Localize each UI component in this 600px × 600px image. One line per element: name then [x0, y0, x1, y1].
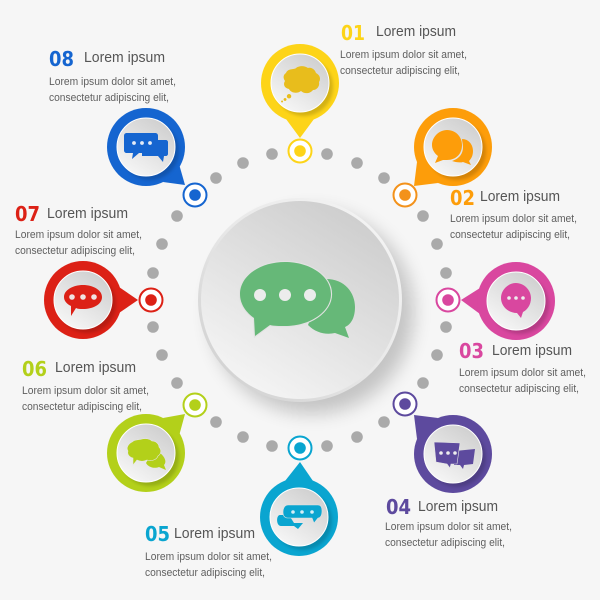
label 06: 06 [22, 357, 47, 381]
label 03 [459, 339, 586, 395]
label 01: 01 [341, 21, 365, 45]
icon: square speech bubbles [434, 442, 475, 469]
label 03: 03 [459, 339, 484, 363]
label 05: Lorem ipsum [174, 525, 255, 542]
pin 04 purple [414, 415, 492, 493]
label 04: Lorem ipsum dolor sit amet, [385, 521, 512, 533]
pin 06 lime [107, 414, 185, 492]
icon: wide speech bubbles [277, 505, 322, 529]
node 02 [394, 184, 416, 206]
icon: oval speech bubble [64, 285, 102, 316]
label 08: consectetur adipiscing elit, [49, 92, 169, 104]
icon: round speech bubble [501, 283, 531, 318]
icon: thought cloud [281, 66, 320, 102]
label 04: consectetur adipiscing elit, [385, 537, 505, 549]
icon: two speech bubbles [432, 130, 473, 165]
label 07: Lorem ipsum [47, 205, 128, 222]
label 07: consectetur adipiscing elit, [15, 245, 135, 257]
label 02: consectetur adipiscing elit, [450, 229, 570, 241]
label 04 [385, 495, 512, 549]
pin 08 blue [107, 108, 185, 186]
label 04: Lorem ipsum [418, 498, 498, 515]
label 05: Lorem ipsum dolor sit amet, [145, 551, 272, 563]
icon: central chat bubbles [240, 262, 355, 338]
pin 01 yellow [261, 44, 339, 138]
label 06 [22, 357, 149, 413]
label 02 [450, 186, 577, 241]
label 08: 08 [49, 47, 74, 71]
label 01: consectetur adipiscing elit, [340, 65, 460, 77]
node 01 [288, 140, 312, 162]
node 03 [436, 288, 460, 312]
pin 05 cyan [260, 462, 338, 556]
label 05: consectetur adipiscing elit, [145, 567, 265, 579]
label 07: 07 [15, 202, 40, 226]
pin 07 red [44, 261, 138, 339]
label 06: consectetur adipiscing elit, [22, 401, 142, 413]
label 01 [340, 21, 467, 77]
node 08 [184, 184, 206, 206]
label 02: Lorem ipsum dolor sit amet, [450, 213, 577, 225]
pin 03 magenta [461, 262, 555, 340]
label 08 [49, 47, 176, 104]
icon: rounded square bubbles [124, 133, 168, 162]
label 03: Lorem ipsum dolor sit amet, [459, 367, 586, 379]
pin 02 orange [414, 108, 492, 186]
label 08: Lorem ipsum dolor sit amet, [49, 76, 176, 88]
node 05 [288, 436, 312, 460]
label 05 [145, 522, 272, 579]
label 03: consectetur adipiscing elit, [459, 383, 579, 395]
label 01: Lorem ipsum dolor sit amet, [340, 49, 467, 61]
dotted ring [147, 148, 452, 452]
label 06: Lorem ipsum dolor sit amet, [22, 385, 149, 397]
central chat disc [198, 198, 414, 414]
label 04: 04 [386, 495, 411, 519]
node 04 [394, 392, 416, 416]
label 02: 02 [450, 186, 475, 210]
label 03: Lorem ipsum [492, 342, 572, 359]
label 01: Lorem ipsum [376, 23, 456, 40]
node 07 [140, 288, 162, 312]
label 02: Lorem ipsum [480, 188, 560, 205]
icon: cloud bubbles [127, 439, 166, 470]
label 06: Lorem ipsum [55, 359, 136, 376]
node 06 [184, 394, 206, 416]
label 05: 05 [145, 522, 170, 546]
label 07 [15, 202, 142, 257]
label 08: Lorem ipsum [84, 49, 165, 66]
label 07: Lorem ipsum dolor sit amet, [15, 229, 142, 241]
